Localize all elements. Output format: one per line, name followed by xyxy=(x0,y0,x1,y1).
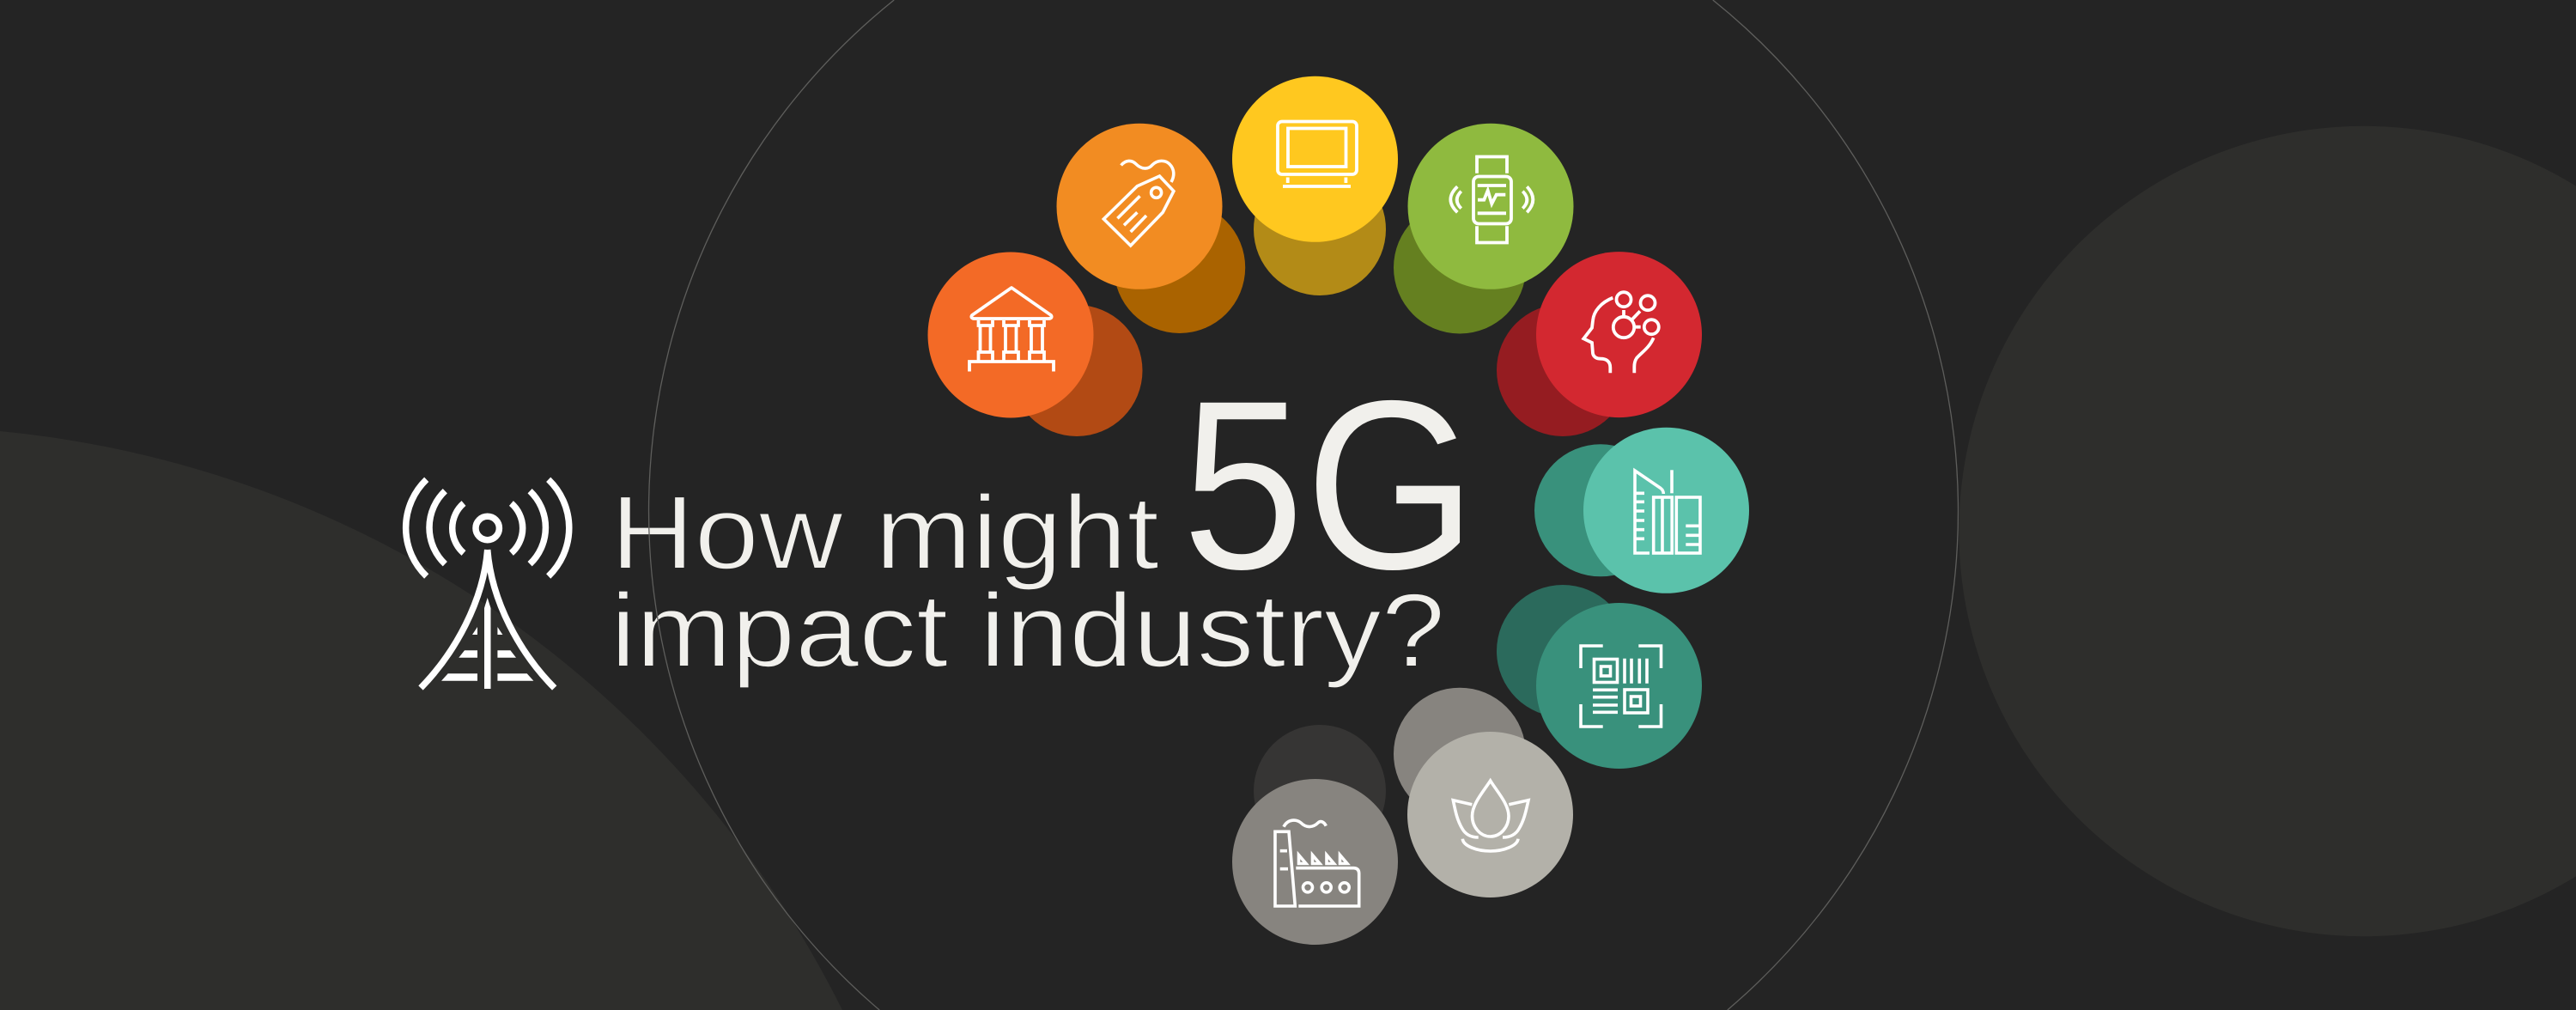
disc: wearables, green xyxy=(1408,124,1573,289)
shadow discs behind the coloured circles xyxy=(1012,163,1667,857)
disc: logistics, dark teal xyxy=(1536,603,1702,769)
disc: smart city, light teal xyxy=(1583,428,1749,593)
title xyxy=(611,350,1477,689)
icon: broadcast tower xyxy=(406,479,569,689)
icon: city buildings xyxy=(1635,470,1700,553)
icon: monitor xyxy=(1278,122,1357,186)
disc: AI, red xyxy=(1536,252,1702,417)
title 5G: 5G xyxy=(1182,350,1477,620)
disc: retail, amber xyxy=(1056,124,1223,289)
icon: factory xyxy=(1275,820,1359,906)
disc: media, yellow xyxy=(1232,76,1398,242)
icon: head with network nodes xyxy=(1583,292,1659,373)
background circle: right xyxy=(1959,126,2576,936)
disc: manufacturing, grey xyxy=(1232,779,1398,945)
disc: government, orange xyxy=(927,252,1094,417)
icon: classical bank building xyxy=(969,288,1054,371)
icon: lotus and oil drop xyxy=(1453,781,1528,851)
title line 1: How might xyxy=(611,474,1159,591)
icon: QR code scanner xyxy=(1581,646,1661,727)
thin ring outline xyxy=(649,0,1958,1010)
disc: energy, light grey xyxy=(1407,732,1573,897)
icon: smart watch xyxy=(1450,156,1533,242)
title line 2: impact industry? xyxy=(611,572,1445,689)
background circle: lower left xyxy=(0,431,842,1010)
icon: price tag xyxy=(1103,161,1174,246)
